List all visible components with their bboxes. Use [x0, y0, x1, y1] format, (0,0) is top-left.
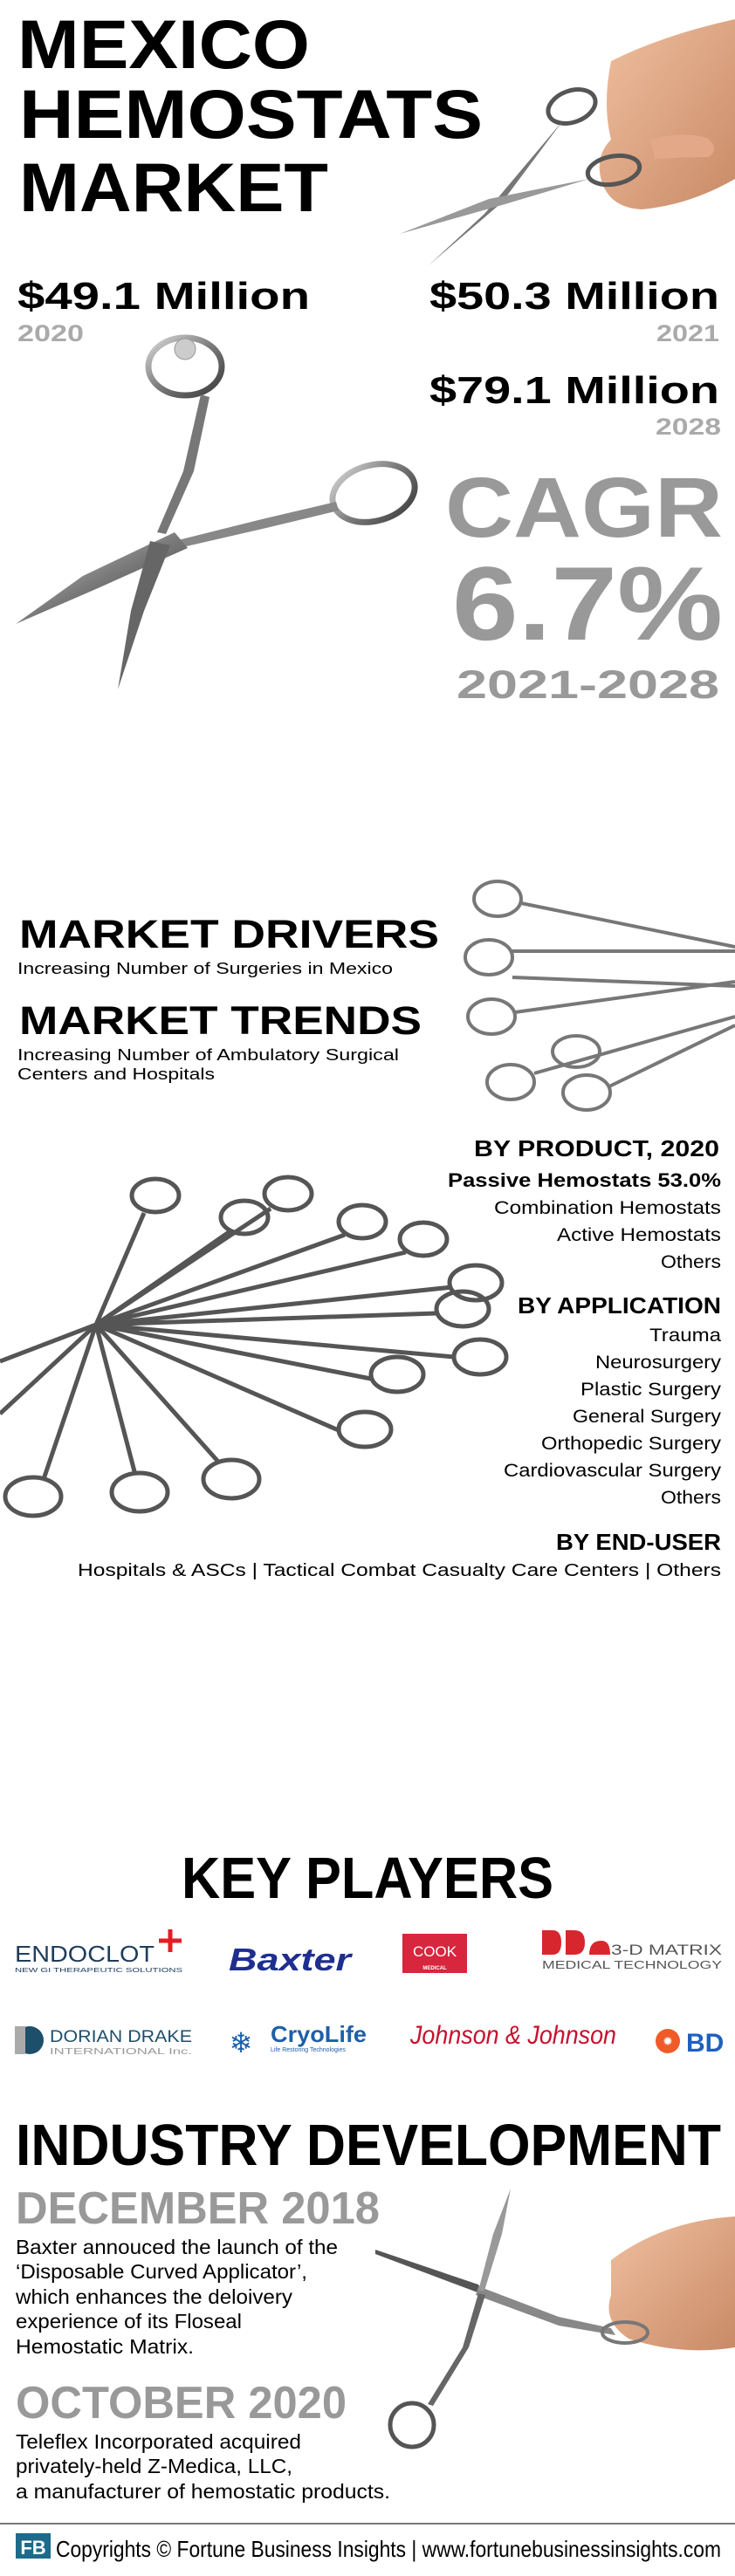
icon: logo: FB	[20, 2537, 46, 2559]
logo: Dorian Drake: INTERNATIONAL Inc.	[50, 2047, 192, 2057]
by end-user	[78, 1529, 721, 1580]
key players heading: KEY PLAYERS	[182, 1846, 553, 1911]
by product: Others	[661, 1252, 721, 1272]
by application: Trauma	[649, 1326, 721, 1346]
value 2020: $49.1 Million	[17, 275, 310, 318]
event: October 2020: a manufacturer of hemostatic products.	[16, 2480, 390, 2503]
value 2021: 2021	[656, 320, 719, 346]
title	[17, 5, 483, 226]
event: December 2018: Baxter annouced the launch of the	[16, 2236, 338, 2258]
by product: BY PRODUCT, 2020	[474, 1135, 719, 1161]
event: December 2018: experience of its Floseal	[16, 2310, 242, 2333]
value 2021	[429, 275, 719, 346]
by end-user: Hospitals & ASCs | Tactical Combat Casualty Care Centers | Others	[78, 1561, 721, 1580]
by end-user: BY END-USER	[556, 1529, 721, 1555]
by application	[504, 1292, 722, 1508]
logo: Baxter: Baxter	[229, 1942, 353, 1977]
CAGR: 2021-2028	[457, 662, 719, 707]
image: large scissors	[16, 338, 422, 689]
logo: CryoLife: ❄	[230, 2027, 252, 2059]
event: October 2020: privately-held Z-Medica, LLC,	[16, 2455, 292, 2477]
image: hand holding scissors	[400, 19, 735, 266]
value 2028: 2028	[656, 414, 721, 440]
by product: Combination Hemostats	[494, 1198, 721, 1218]
market drivers	[17, 912, 439, 977]
logo: BD	[656, 2029, 724, 2058]
event: December 2018	[15, 2183, 380, 2358]
by application: Others	[661, 1488, 721, 1508]
value 2020	[17, 275, 310, 346]
market trends	[17, 998, 422, 1083]
market trends: MARKET TRENDS	[19, 998, 422, 1043]
event: December 2018: Hemostatic Matrix.	[16, 2335, 194, 2358]
value 2028: $79.1 Million	[429, 369, 719, 412]
logo: Johnson & Johnson: Johnson & Johnson	[409, 2021, 616, 2050]
by application: Neurosurgery	[595, 1353, 722, 1373]
logo: 3-D Matrix: MEDICAL TECHNOLOGY	[542, 1958, 722, 1971]
logo: Dorian Drake	[15, 2026, 192, 2057]
event: October 2020: Teleflex Incorporated acquired	[16, 2430, 301, 2453]
by product	[448, 1135, 721, 1272]
title: HEMOSTATS	[19, 75, 483, 153]
market drivers: MARKET DRIVERS	[19, 912, 439, 956]
by application: General Surgery	[573, 1407, 722, 1427]
CAGR	[445, 460, 723, 707]
by application: Orthopedic Surgery	[541, 1434, 722, 1454]
logo: BD: BD	[686, 2029, 724, 2058]
logo: Cook	[402, 1934, 467, 1973]
event: December 2018: DECEMBER 2018	[16, 2183, 380, 2234]
value 2021: $50.3 Million	[429, 275, 719, 318]
logo: CryoLife: CryoLife	[271, 2021, 367, 2047]
logo: 3-D Matrix	[542, 1930, 722, 1971]
logo: EndoClot	[15, 1929, 183, 1974]
by application: Cardiovascular Surgery	[504, 1461, 722, 1481]
event: October 2020	[16, 2378, 390, 2503]
image: forceps top right	[465, 881, 735, 1110]
CAGR: CAGR	[445, 460, 723, 555]
logo: CryoLife	[230, 2021, 367, 2059]
by application: Plastic Surgery	[580, 1380, 722, 1400]
event: October 2020: OCTOBER 2020	[16, 2378, 347, 2429]
image: hand with scissors	[375, 2189, 735, 2447]
logo: EndoClot: NEW GI THERAPEUTIC SOLUTIONS	[15, 1968, 183, 1974]
market trends: Centers and Hospitals	[17, 1065, 215, 1083]
logo: Dorian Drake: DORIAN DRAKE	[50, 2028, 192, 2046]
logo: BD: ✹	[663, 2034, 673, 2048]
logo: 3-D Matrix: 3-D MATRIX	[611, 1942, 722, 1958]
by application: BY APPLICATION	[518, 1292, 721, 1319]
logo: Cook: COOK	[413, 1943, 457, 1960]
event: December 2018: ‘Disposable Curved Applicator’,	[16, 2260, 307, 2283]
value 2020: 2020	[17, 320, 84, 346]
logo: Cook: MEDICAL	[422, 1966, 447, 1971]
by product: Active Hemostats	[557, 1225, 721, 1245]
logo: CryoLife: Life Restoring Technologies	[271, 2047, 346, 2053]
event: December 2018: which enhances the deloivery	[15, 2285, 293, 2308]
market trends: Increasing Number of Ambulatory Surgical	[17, 1046, 399, 1064]
logos	[15, 1929, 724, 2059]
title: MARKET	[19, 148, 328, 226]
value 2028	[429, 369, 721, 440]
image: forceps fan	[0, 1177, 506, 1516]
market drivers: Increasing Number of Surgeries in Mexico	[17, 960, 393, 977]
icon: logo	[16, 2533, 51, 2559]
CAGR: 6.7%	[452, 545, 723, 662]
by product: Passive Hemostats 53.0%	[448, 1169, 721, 1191]
logo: EndoClot: ENDOCLOT	[15, 1941, 155, 1967]
title: MEXICO	[17, 5, 310, 83]
